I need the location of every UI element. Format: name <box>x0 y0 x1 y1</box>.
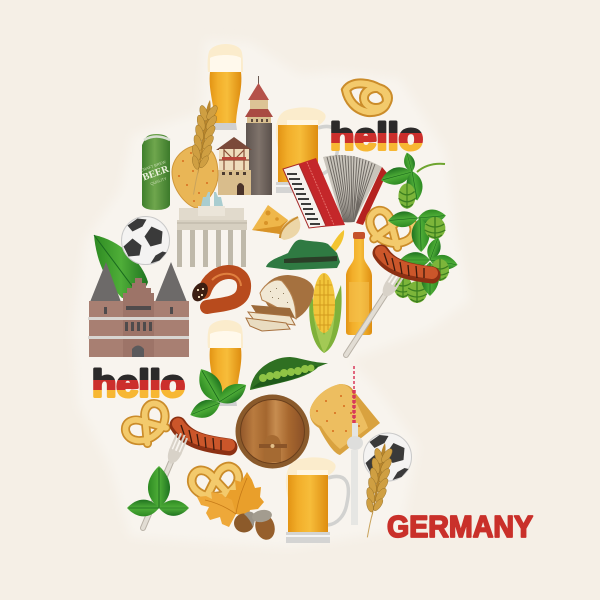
sausage ring <box>189 272 244 307</box>
beer mug: top <box>276 107 338 193</box>
beer glass: middle <box>208 320 243 406</box>
wheat ear: bottom <box>357 441 396 540</box>
pea pod <box>250 357 328 390</box>
green leaves: bottom <box>127 466 189 516</box>
football: top <box>122 216 170 264</box>
wheat ear: top <box>183 98 221 197</box>
map silhouette: Germany <box>72 40 470 548</box>
bottle <box>346 232 372 335</box>
football: bottom <box>364 433 412 481</box>
hello lettering: top: hello <box>330 116 423 158</box>
hops: middle <box>387 208 447 252</box>
hops: bottom <box>394 235 459 303</box>
berlin tv tower <box>347 366 363 525</box>
pretzel: left <box>122 400 174 450</box>
sausage on fork <box>381 252 432 278</box>
corn <box>309 273 342 353</box>
bread slice <box>172 145 218 208</box>
pretzel: bottom <box>190 465 241 501</box>
toast <box>310 384 380 455</box>
pretzel: top right <box>346 83 388 112</box>
sausage: left <box>178 424 229 450</box>
fork: middle <box>341 266 407 359</box>
wooden barrel <box>236 394 310 468</box>
green leaves: middle <box>187 364 251 423</box>
accordion <box>283 155 387 228</box>
castle tower <box>245 76 273 195</box>
bread loaf <box>246 275 314 331</box>
holstentor gate <box>88 262 189 357</box>
pretzel: middle right <box>364 208 417 251</box>
oak leaves <box>197 472 264 527</box>
beer glass: top <box>208 44 243 130</box>
hops: top <box>379 151 445 209</box>
acorns <box>234 508 278 542</box>
beer mug: bottom <box>286 457 348 543</box>
hello lettering: left: hello <box>92 364 185 406</box>
alpine hat <box>266 230 344 270</box>
fork: bottom <box>137 432 189 531</box>
beer can: QUALITY <box>150 176 168 186</box>
title: Germany: GERMANY <box>387 509 533 544</box>
large green leaf <box>94 235 148 298</box>
beer can <box>140 134 171 210</box>
half-timbered house <box>216 137 252 195</box>
cheese <box>252 205 300 240</box>
brandenburg gate <box>177 192 247 267</box>
beer can: CRAFT BREW <box>140 159 167 173</box>
beer can: BEER <box>141 163 171 183</box>
